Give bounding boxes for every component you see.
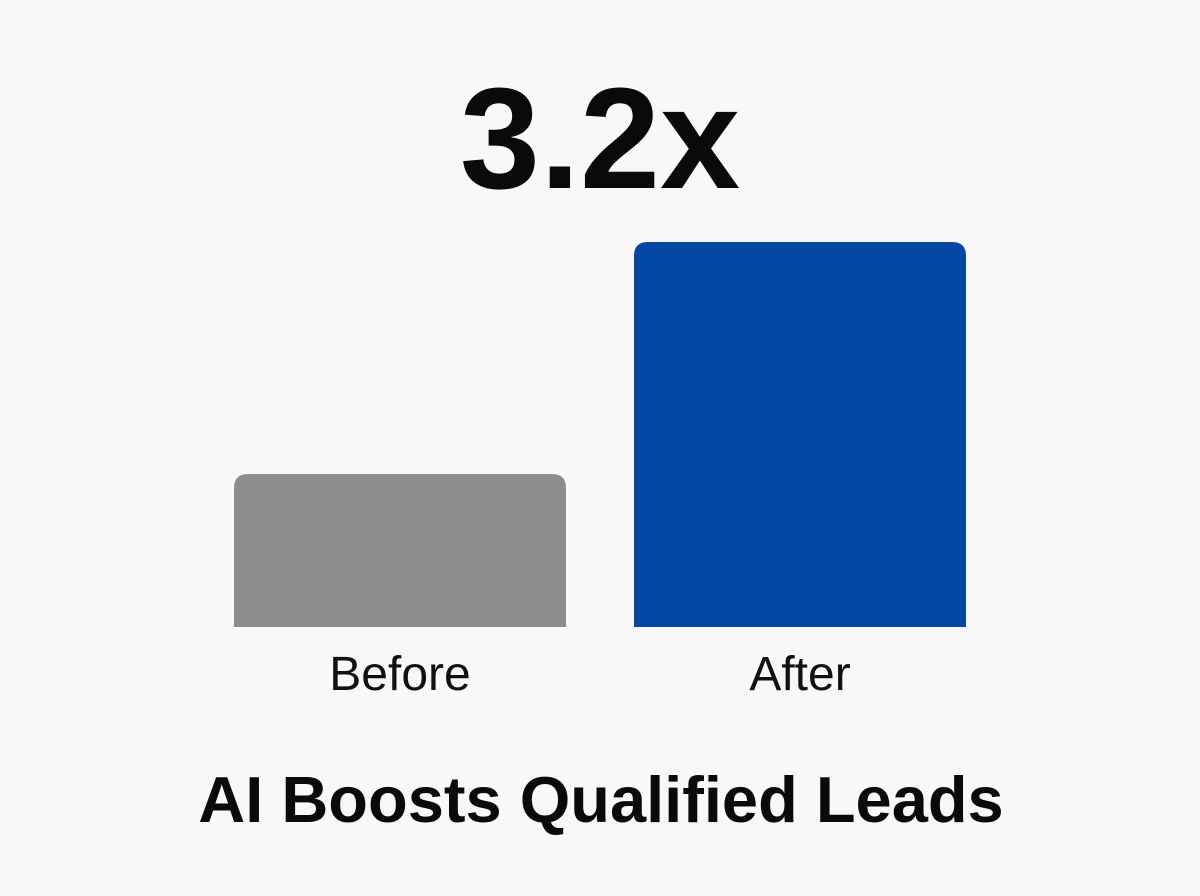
bar chart [234, 242, 966, 701]
bar: Before [234, 474, 566, 627]
headline number: 3.2x: 3.2x [460, 58, 740, 219]
label: After: After [749, 648, 851, 701]
bar: After [634, 242, 966, 627]
label: Before: Before [329, 648, 471, 701]
title: AI Boosts Qualified Leads [198, 763, 1004, 836]
